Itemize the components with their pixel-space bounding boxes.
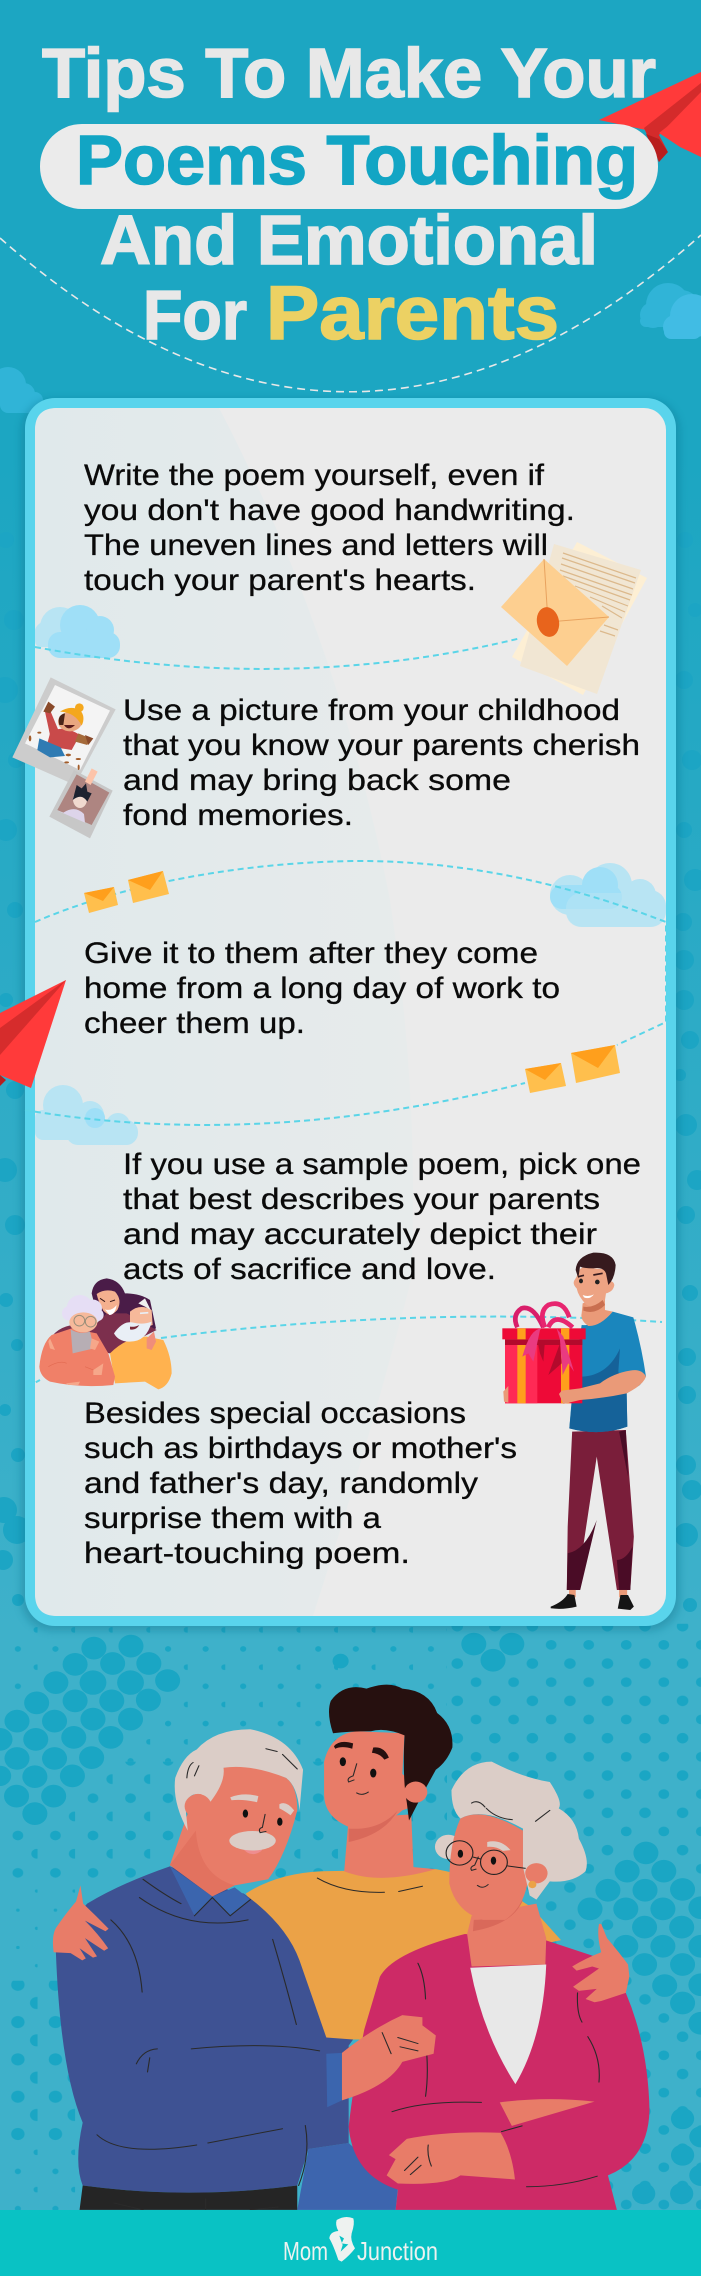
tip text 3: Give it to them after they come: [84, 937, 538, 970]
icon: man holding gift: [502, 1253, 646, 1610]
cloud: top right: [640, 283, 701, 339]
dashed arc: [0, 235, 701, 392]
title: [40, 34, 658, 356]
upper body: [502, 1253, 646, 1432]
icon: envelopes upper: [84, 871, 169, 913]
tip text 2: Use a picture from your childhood: [123, 694, 620, 727]
tip text 4: that best describes your parents: [123, 1183, 600, 1216]
panel shadow: [21, 399, 680, 1631]
tip text 4: and may accurately depict their: [123, 1218, 597, 1251]
panel border: [25, 398, 676, 1626]
dashed line 4: [27, 1317, 662, 1387]
tip text 1: [84, 459, 575, 597]
title highlight: Parents: [266, 271, 559, 356]
side dot pattern: [0, 532, 701, 1612]
title line 1: Tips To Make Your: [42, 34, 656, 112]
forearm and hands: [559, 1370, 646, 1404]
logo: [283, 2217, 438, 2266]
grandfather: [53, 1729, 353, 2210]
jeans: [297, 2143, 398, 2210]
icon: paper plane left: [0, 980, 66, 1088]
panel: tips: [12, 398, 680, 1631]
icon: envelope and letter: [501, 542, 647, 695]
cloud: panel 2: [550, 863, 666, 927]
son's hand: [572, 1924, 629, 2002]
tip text 2: fond memories.: [123, 799, 353, 832]
icon: childhood photos: [12, 677, 116, 838]
icon: small family: [39, 1278, 172, 1389]
tip text 5: Besides special occasions: [84, 1397, 466, 1430]
tip text 5: heart-touching poem.: [84, 1537, 410, 1570]
tip text 4: acts of sacrifice and love.: [123, 1253, 496, 1286]
logo text: Mom: [283, 2236, 328, 2266]
grandfather's shoulder hand: [53, 1885, 109, 1960]
tip text 5: [84, 1397, 517, 1570]
tip text 2: and may bring back some: [123, 764, 511, 797]
daughter: [48, 1278, 157, 1353]
grandfather hand: [342, 2015, 436, 2100]
tip text 2: [123, 694, 640, 832]
footer band: [0, 2210, 701, 2276]
legs: [551, 1430, 634, 1610]
tip text 1: Write the poem yourself, even if: [84, 459, 545, 492]
tip text 5: surprise them with a: [84, 1502, 381, 1535]
panel body: [35, 408, 666, 1616]
tip text 4: If you use a sample poem, pick one: [123, 1148, 641, 1181]
tip text 3: home from a long day of work to: [84, 972, 560, 1005]
icon: envelopes lower: [525, 1045, 620, 1093]
grandfather arm: [326, 2053, 342, 2107]
tip text 5: such as birthdays or mother's: [84, 1432, 517, 1465]
gift: [502, 1304, 586, 1403]
panel tint: [35, 408, 413, 1616]
tip text 1: The uneven lines and letters will: [84, 529, 548, 562]
cloud: top left: [0, 367, 43, 413]
title pill: [40, 124, 658, 209]
icon: paper plane top: [599, 72, 701, 162]
logo text: Junction: [357, 2236, 438, 2266]
tip text 3: [84, 937, 560, 1040]
dashed line 1: [35, 638, 521, 669]
dashed line 3: [25, 1083, 525, 1125]
large photo: [12, 677, 116, 785]
tip text 1: touch your parent's hearts.: [84, 564, 476, 597]
title line 4: For: [143, 276, 247, 354]
grandmother: [349, 1762, 649, 2210]
tip text 1: you don't have good handwriting.: [84, 494, 575, 527]
tip text 5: and father's day, randomly: [84, 1467, 478, 1500]
son: [246, 1685, 561, 2040]
title line 3: And Emotional: [100, 201, 598, 279]
small photo: [49, 768, 113, 838]
cloud: panel 1: [35, 605, 120, 658]
dashed line 2: [35, 861, 666, 1045]
title line 2: Poems Touching: [76, 121, 638, 199]
tip text 3: cheer them up.: [84, 1007, 305, 1040]
logo icon: [329, 2217, 355, 2262]
grandmother: [39, 1295, 115, 1386]
logo text: [283, 2236, 438, 2266]
tip text 2: that you know your parents cherish: [123, 729, 640, 762]
grandfather: [110, 1298, 172, 1389]
tip text 4: [123, 1148, 641, 1286]
bottom dot pattern: [0, 1624, 701, 2212]
illustration: family: [53, 1685, 649, 2210]
cloud: panel 3: [35, 1085, 138, 1145]
